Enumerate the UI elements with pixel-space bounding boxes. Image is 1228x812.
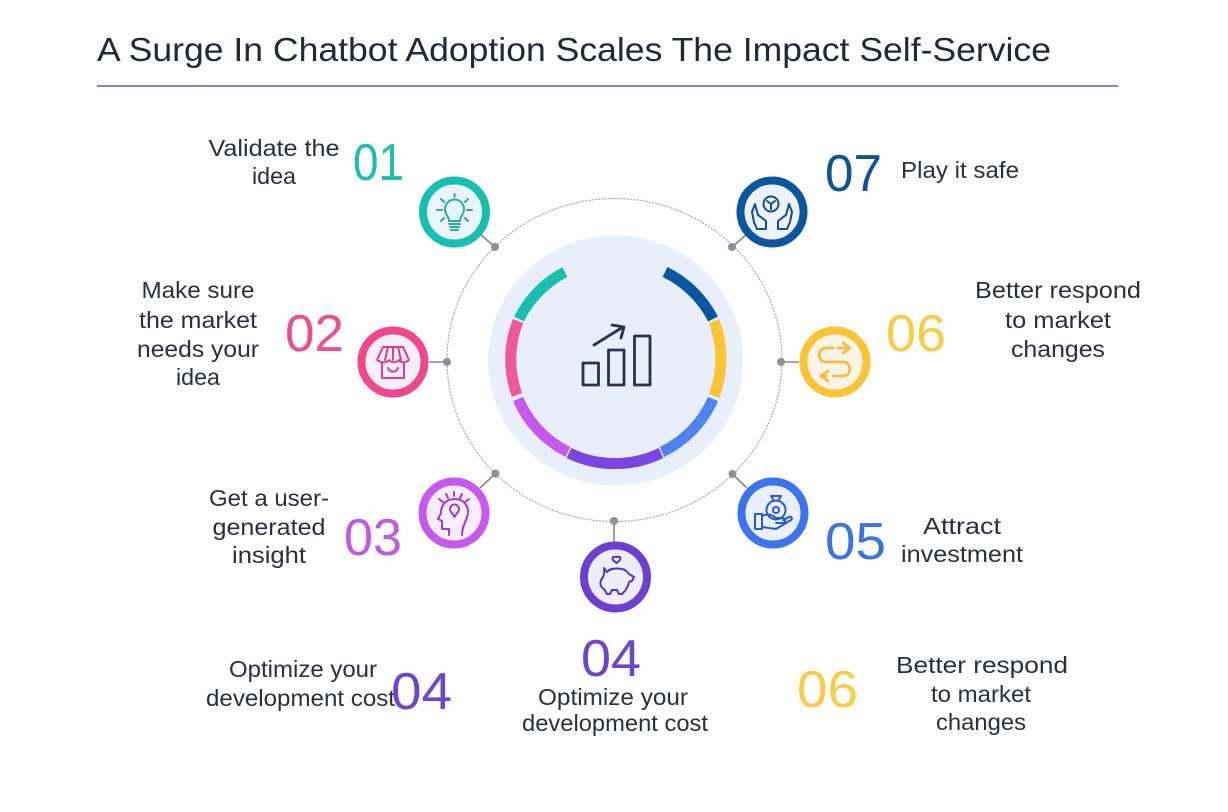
title: A Surge In Chatbot Adoption Scales The Impact Self-Service bbox=[97, 31, 1051, 68]
item 06 bottom: to market bbox=[931, 681, 1032, 707]
icon: head with idea bbox=[422, 482, 486, 544]
item 04 centre: Optimize your bbox=[538, 684, 688, 710]
item 04 left bbox=[206, 656, 452, 721]
icon: growth bar chart bbox=[583, 325, 650, 385]
item 03: generated bbox=[212, 514, 326, 540]
item 02: Make sure bbox=[142, 277, 254, 303]
item 04 left: Optimize your bbox=[229, 656, 377, 682]
item 06 bottom: Better respond bbox=[896, 652, 1068, 678]
item 02 bbox=[137, 277, 344, 390]
central hub bbox=[447, 198, 782, 522]
item 06 right: changes bbox=[1011, 336, 1105, 362]
item 01 bbox=[208, 134, 404, 192]
item 06 bottom: 06 bbox=[797, 661, 858, 719]
item 01: idea bbox=[252, 163, 296, 189]
item 05: Attract bbox=[923, 513, 1002, 539]
item 05: 05 bbox=[825, 513, 886, 571]
icon: light bulb bbox=[423, 180, 486, 244]
segmented progress ring bbox=[511, 272, 721, 464]
connectors and nodes bbox=[429, 234, 799, 542]
item 06 right bbox=[886, 277, 1141, 363]
item 04 left: 04 bbox=[391, 663, 452, 721]
item 01: Validate the bbox=[208, 135, 340, 161]
item 04 left: development cost bbox=[206, 685, 396, 711]
item 05 bbox=[825, 513, 1024, 571]
item 06 right: to market bbox=[1005, 307, 1112, 333]
dotted outer ring bbox=[447, 198, 782, 522]
item 06 right: 06 bbox=[886, 305, 946, 363]
item 03: Get a user- bbox=[209, 485, 329, 511]
item 02: the market bbox=[139, 307, 258, 333]
item 01: 01 bbox=[353, 134, 404, 192]
icon: S-shaped arrows bbox=[804, 330, 866, 394]
icon: hand with money bag bbox=[742, 482, 804, 544]
item 02: needs your bbox=[137, 336, 259, 362]
icon: hands holding plant bbox=[740, 180, 804, 244]
pale centre disc bbox=[488, 236, 743, 486]
item 07 bbox=[825, 145, 1019, 203]
icon: shop bbox=[362, 330, 424, 394]
item 04 centre: development cost bbox=[522, 710, 709, 736]
item 03 bbox=[209, 485, 402, 568]
item 02: idea bbox=[176, 364, 220, 390]
item 06 right: Better respond bbox=[975, 277, 1141, 303]
icon: piggy bank bbox=[584, 546, 647, 608]
item 04 centre bbox=[522, 630, 709, 736]
item 07: 07 bbox=[825, 145, 882, 203]
item 02: 02 bbox=[285, 305, 344, 363]
item 06 bottom: changes bbox=[936, 709, 1026, 735]
item 06 bottom bbox=[797, 652, 1068, 735]
item 05: investment bbox=[901, 541, 1024, 567]
item 07: Play it safe bbox=[901, 157, 1019, 183]
item 04 centre: 04 bbox=[581, 630, 641, 688]
item 03: 03 bbox=[344, 509, 402, 567]
item 03: insight bbox=[232, 542, 307, 568]
